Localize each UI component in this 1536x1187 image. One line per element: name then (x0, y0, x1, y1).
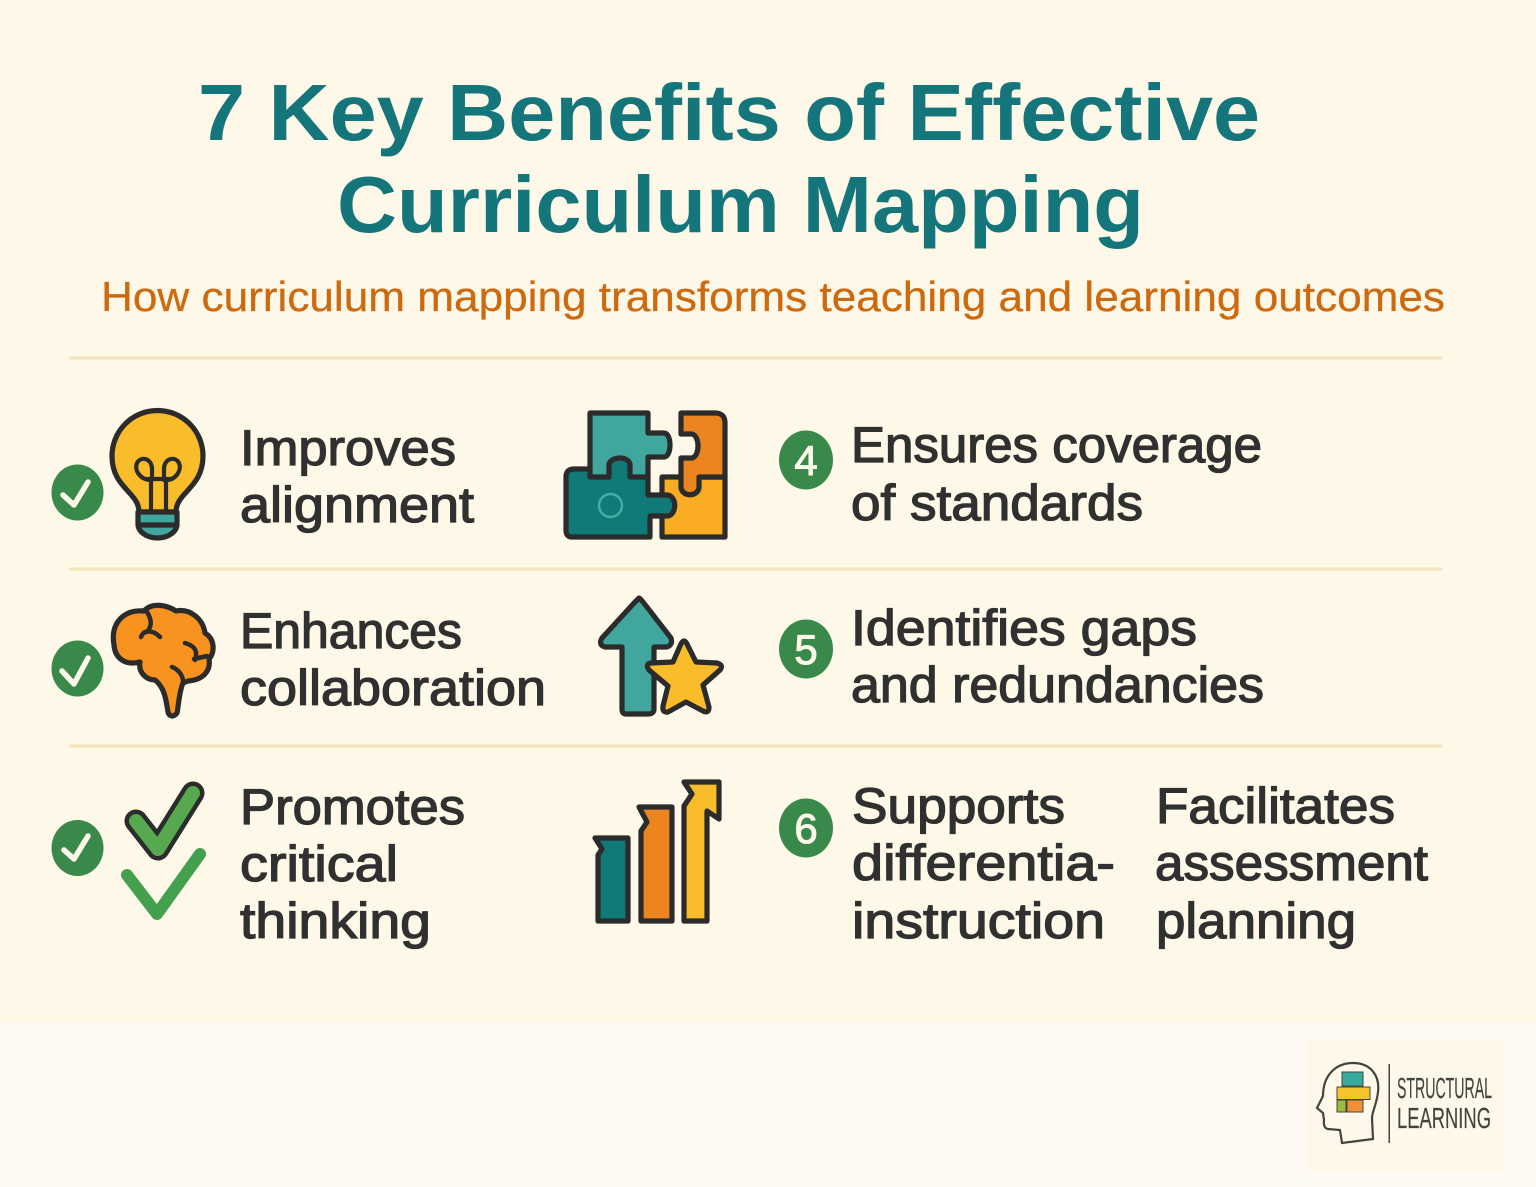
text: promotes critical thinking: thinking (240, 893, 431, 949)
text: identifies gaps and redundancies: Identifies gaps (851, 600, 1197, 656)
text: facilitates assessment planning: planning (1156, 893, 1356, 949)
text: improves alignment (240, 420, 474, 533)
icon: arrow and star (601, 598, 721, 714)
badge: number 4: 4 (794, 437, 818, 484)
title: Curriculum Mapping (337, 160, 1144, 249)
icon: rising bars chart (595, 782, 719, 921)
icon: double check marks (127, 793, 200, 914)
icon: green check badge 2 (52, 640, 104, 696)
badge: number 5 (779, 620, 833, 678)
icon: green check badge 3 (52, 820, 104, 876)
icon: brain (113, 605, 213, 716)
text: ensures coverage of standards: Ensures coverage (851, 417, 1262, 473)
text: promotes critical thinking: Promotes (240, 779, 465, 835)
text: promotes critical thinking (240, 779, 465, 949)
text: promotes critical thinking: critical (240, 836, 398, 892)
benefit: promotes critical thinking (52, 779, 465, 949)
text: enhances collaboration: Enhances (240, 603, 462, 659)
badge: number 4 (779, 430, 833, 490)
benefit: enhances collaboration (52, 603, 546, 716)
badge: number 6: 6 (794, 805, 818, 852)
text: supports differentia- instruction: instruction (852, 893, 1105, 949)
text: identifies gaps and redundancies: and redundancies (851, 657, 1264, 713)
badge: number 5: 5 (794, 626, 818, 673)
title (198, 68, 1260, 249)
benefit: identifies gaps (601, 598, 1264, 714)
logo wordmark (1397, 1073, 1492, 1135)
text: facilitates assessment planning (1155, 778, 1428, 949)
text: identifies gaps and redundancies (851, 600, 1264, 713)
icon: head with blocks (1317, 1063, 1378, 1143)
text: facilitates assessment planning: Facilitates (1156, 778, 1395, 834)
text: supports differentia- instruction: Supports (852, 778, 1065, 834)
icon: puzzle pieces (566, 413, 725, 537)
text: supports differentia- instruction: differentia- (852, 835, 1115, 891)
badge: number 6 (779, 798, 833, 858)
benefit: improves alignment (52, 411, 474, 538)
text: ensures coverage of standards: of standards (851, 475, 1143, 531)
subtitle: How curriculum mapping transforms teaching and learning outcomes (101, 273, 1445, 320)
text: enhances collaboration: collaboration (240, 660, 546, 716)
icon: light bulb (112, 411, 203, 538)
text: improves alignment: Improves (240, 420, 456, 476)
title: 7 Key Benefits of Effective (198, 68, 1260, 157)
text: improves alignment: alignment (240, 477, 474, 533)
text: supports differentia- instruction (852, 778, 1115, 949)
text: ensures coverage of standards (851, 417, 1262, 531)
benefit: ensures coverage (566, 413, 1262, 537)
text: enhances collaboration (240, 603, 546, 716)
benefit: supports differentiated instruction and facilitates assessment planning (595, 778, 1428, 949)
text: facilitates assessment planning: assessment (1155, 835, 1428, 891)
logo: structural learning (1307, 1040, 1506, 1172)
icon: green check badge 1 (52, 464, 104, 520)
